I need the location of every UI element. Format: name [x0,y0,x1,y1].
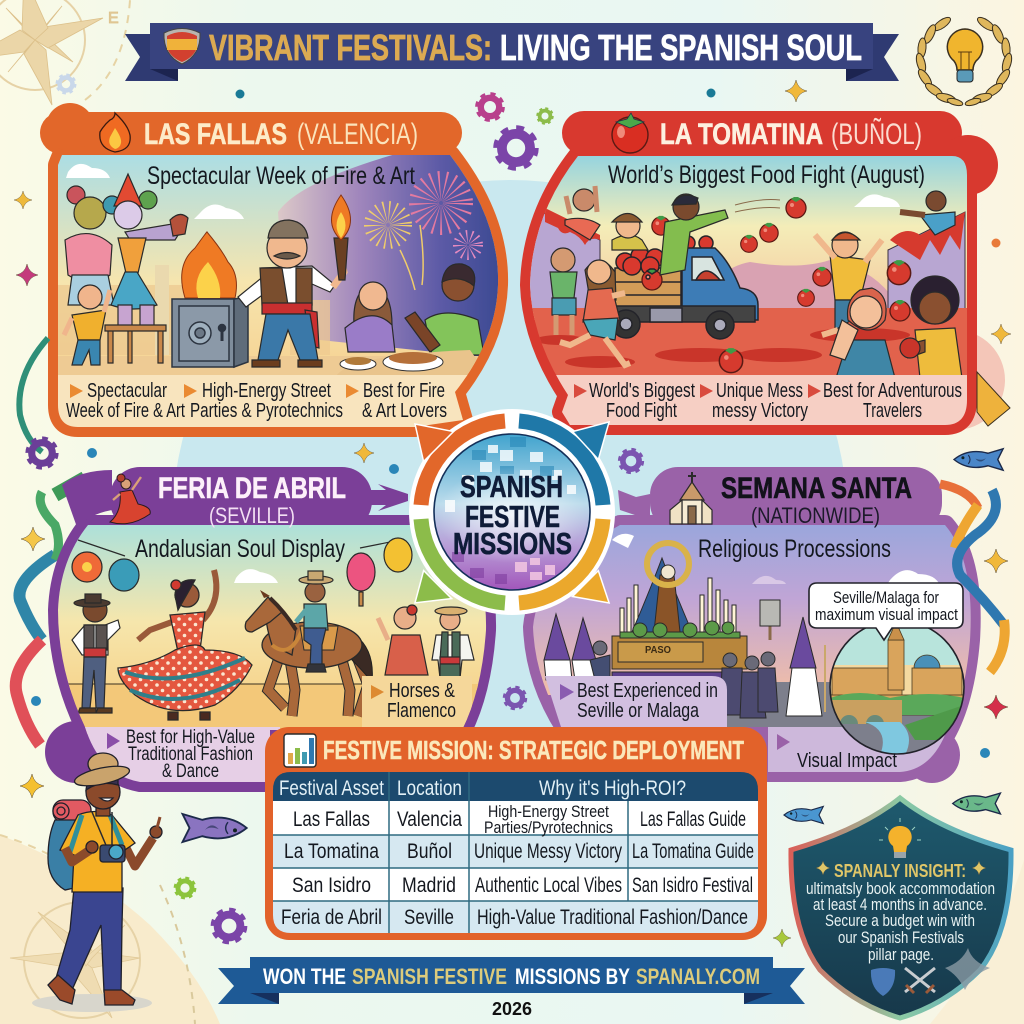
hub title: MISSIONS [453,526,572,561]
icon: bar chart [284,734,316,767]
title [209,27,862,68]
disco ball [434,434,590,590]
bullet: best experienced: Best Experienced in [577,680,718,702]
bullets [574,380,962,422]
illustration: procession scene [533,525,971,772]
icon: shield and swords [871,968,935,996]
icon: laurel and light bulb [915,15,1013,107]
year: 2026 [492,999,532,1019]
ribbon: right streamers [940,484,1005,672]
insight shield [791,798,1011,1018]
couple [378,605,474,679]
table row: las fallas [293,802,746,837]
table row: feria de abril: Seville [404,906,454,929]
illustration: fire festival scene [50,150,510,430]
dancer [118,570,252,720]
footer ribbon: WON THE [263,964,346,989]
icon: dancer [110,474,150,524]
compass rose bottom-left [10,902,140,1018]
band right [362,676,472,732]
insight text: pillar page. [868,946,934,964]
insight text: Secure a budget win with [825,912,975,930]
table row: feria de abril: Feria de Abril [281,906,382,929]
hub title: SPANISH [460,469,563,504]
table row: san isidro: Madrid [402,874,456,897]
bullets: High-Energy Street [202,380,331,402]
compass rose top-left [0,0,119,105]
footer ribbon: MISSIONS BY [515,964,630,989]
bullets: Food Fight [606,400,677,422]
people on walls [550,186,955,335]
tomatoes in the air [652,197,911,373]
decorative gears [28,75,642,942]
lanterns [72,538,412,606]
header ribbon [125,23,899,81]
icon: bulb [879,818,921,858]
panel heading [158,472,346,528]
panel heading: (VALENCIA) [297,118,418,151]
subtitle: World’s Biggest Food Fight (August) [608,161,925,189]
subtitle: Andalusian Soul Display [135,535,345,563]
bullets: Parties & Pyrotechnics [190,400,343,422]
table [273,772,758,933]
bullet: visual impact [777,734,897,772]
compass rose top-left: E [108,10,119,27]
illustration: flamenco scene [58,525,486,782]
panel heading: LAS FALLAS [144,118,287,151]
table row: la tomatina [284,840,754,863]
panel: feria de abril [40,467,500,787]
table row: las fallas: High-Energy Street [488,802,609,821]
bullets: messy Victory [712,400,808,422]
footer ribbon: SPANALY.COM [636,964,760,989]
callout bubble scene [829,628,965,755]
table row: san isidro [292,874,753,897]
bullets: & Art Lovers [362,400,447,422]
table row: la tomatina: La Tomatina [284,840,379,863]
table header row [279,777,686,800]
bullets: World's Biggest [589,380,695,402]
fish icons [182,449,1003,842]
ribbon: gold [977,372,1010,426]
truck [605,236,758,339]
man in vest [72,594,120,713]
table row: san isidro: Authentic Local Vibes [475,874,622,897]
bullet: horses and flamenco [371,680,456,722]
bullets: Travelers [863,400,922,422]
city circle [830,628,964,754]
footer ribbon [218,957,805,1004]
panel heading: (SEVILLE) [209,503,295,528]
sparkles [816,861,986,875]
bullet: best experienced: Seville or Malaga [577,700,700,722]
heading: FESTIVE MISSION: STRATEGIC DEPLOYMENT [323,735,744,765]
table row: feria de abril: High-Value Traditional Fashion/Dance [477,906,748,929]
bullet: horses and flamenco: Horses & [389,680,456,702]
panel: las fallas [40,103,510,430]
horse [245,590,372,716]
callout: maximum visual impact [815,605,958,624]
panel heading: SEMANA SANTA [721,472,912,505]
ribbon: left streamers [16,338,85,745]
illustration: tomato fight scene [520,150,980,430]
panel heading: FERIA DE ABRIL [158,472,346,505]
heading: SPANALY INSIGHT: [834,861,966,881]
table row: san isidro: San Isidro [292,874,371,897]
bullet: high-value fashion [107,727,255,782]
panel: la tomatina [520,111,1010,430]
bullet: horses and flamenco: Flamenco [387,700,456,722]
icon: spanish shield [164,28,200,64]
table row: la tomatina: Unique Messy Victory [474,840,622,863]
title: LIVING THE SPANISH SOUL [500,27,862,68]
diners [345,264,484,355]
bullets: Week of Fire & Art [66,400,185,422]
hub title: FESTIVE [465,499,560,534]
decorative dots [31,88,1000,758]
subtitle: Spectacular Week of Fire & Art [147,162,415,190]
title: VIBRANT FESTIVALS: [209,27,492,68]
frame [530,111,1005,430]
table row: las fallas: Las Fallas [293,808,370,831]
panel heading: (NATIONWIDE) [751,503,880,528]
footer ribbon: SPANISH FESTIVE [352,964,507,989]
bullet: high-value fashion: & Dance [162,761,219,782]
bullets: Best for Adventurous [823,380,962,402]
nazarenos [544,600,825,718]
paso float [612,540,748,678]
ninot figures [64,174,188,365]
fireworks [375,186,476,290]
rider [296,571,333,672]
insight text: at least 4 months in advance. [813,896,987,914]
safe [172,297,248,367]
illustration: procession scene: PASO [645,645,671,656]
central hub [409,409,615,615]
bullets [66,380,447,422]
table row: la tomatina: La Tomatina Guide [632,840,754,863]
man with torch [238,220,348,367]
table row: feria de abril [281,906,748,929]
bullet: visual impact: Visual Impact [797,750,897,772]
panel: strategic deployment table [265,727,767,940]
frame [45,467,486,783]
icon: flame [100,113,130,152]
panel heading [144,118,418,151]
table row: las fallas: Parties/Pyrotechnics [484,818,613,837]
panel heading: (BUÑOL) [831,117,922,151]
icon: church [670,472,712,524]
frame [533,467,971,783]
bullet band [556,375,967,425]
insight text: our Spanish Festivals [838,929,964,947]
traveler illustration [32,753,162,1012]
table header row: Location [397,777,462,800]
table header row: Why it's High-ROI? [539,777,686,800]
bullets: Spectacular [87,380,167,402]
subtitle: Religious Processions [698,535,891,563]
icon: tomato [612,113,648,153]
band bottom [85,727,280,782]
panel heading [721,472,912,528]
panel heading: LA TOMATINA [660,118,823,151]
hub title [453,469,572,561]
panel: semana santa [520,467,990,783]
table row: las fallas: Valencia [397,808,462,831]
bullets: Best for Fire [363,380,445,402]
bullets: Unique Mess [716,380,803,402]
table row: las fallas: Las Fallas Guide [640,808,746,831]
bullet band [58,375,468,427]
bullet: high-value fashion: Traditional Fashion [128,744,253,765]
table row: la tomatina: Buñol [407,840,452,863]
callout [809,583,963,640]
insight text [806,880,995,964]
bullet: high-value fashion: Best for High-Value [126,727,255,748]
table row: san isidro: San Isidro Festival [632,874,753,897]
fire [182,232,236,298]
table header row: Festival Asset [279,777,384,800]
bullet: best experienced [545,676,727,730]
ring arcs and arrows [421,421,603,603]
callout: Seville/Malaga for [833,588,939,607]
band lower [768,727,946,772]
frame [40,103,498,427]
foreground people [560,194,962,378]
